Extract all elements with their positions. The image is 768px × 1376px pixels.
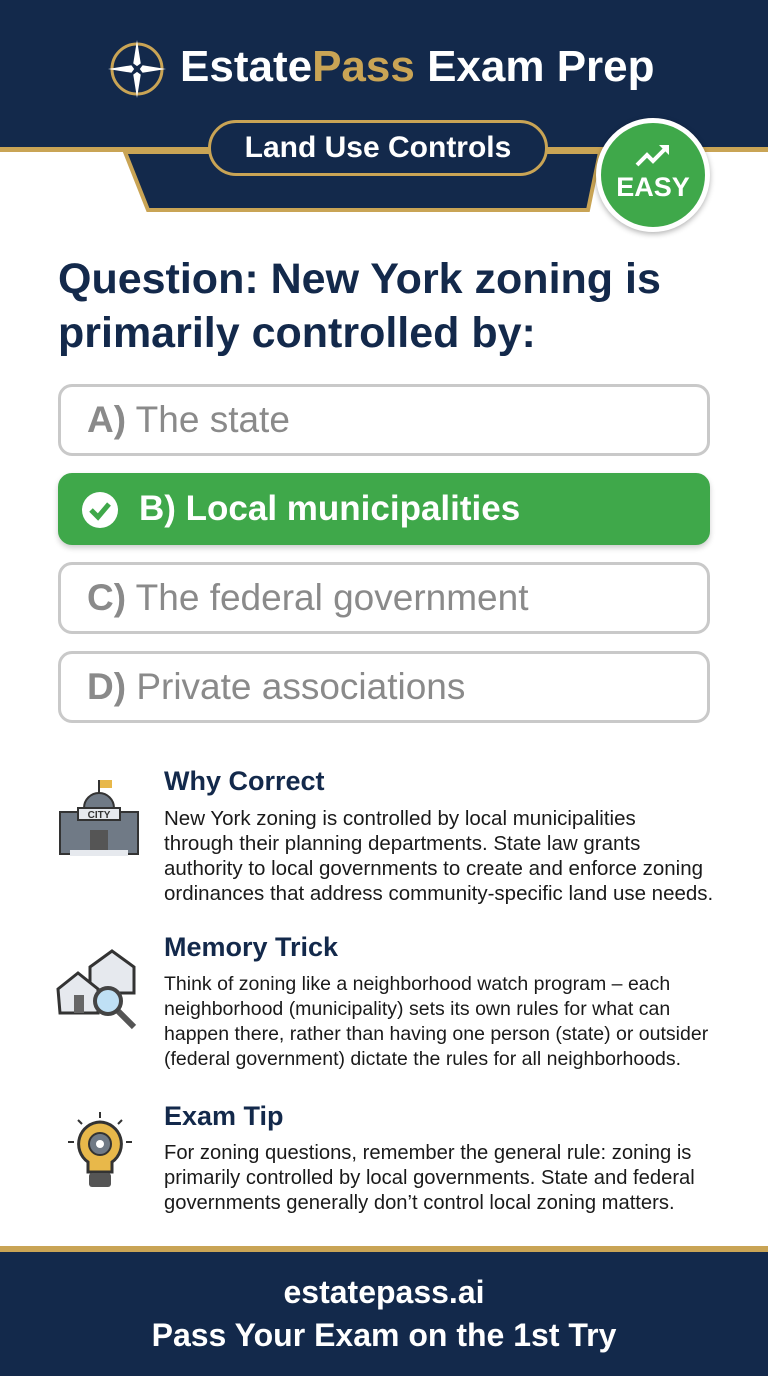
option A: A) The state — [87, 399, 290, 440]
text: exam tip: For zoning questions, remember the general rule: zoning is — [164, 1142, 691, 1164]
heading: exam tip: Exam Tip — [164, 1101, 284, 1131]
icon: city hall: CITY — [88, 810, 111, 821]
logo icon: compass — [108, 40, 166, 98]
icon: city hall — [59, 780, 139, 856]
option A — [58, 384, 710, 456]
footer: estatepass.ai — [283, 1274, 484, 1310]
topic pill: Land Use Controls — [245, 131, 511, 164]
icon: lightbulb gear — [68, 1112, 132, 1187]
text: exam tip: primarily controlled by local governments. State and federal — [164, 1167, 695, 1189]
header band — [0, 0, 768, 152]
footer — [0, 1246, 768, 1376]
difficulty badge — [596, 118, 710, 232]
option D: D) Private associations — [87, 666, 465, 707]
option D — [58, 651, 710, 723]
text: memory trick: Think of zoning like a neighborhood watch program – each — [164, 973, 670, 995]
title: brand: EstatePass Exam Prep — [180, 42, 655, 91]
text: exam tip — [164, 1142, 695, 1214]
option B correct — [58, 473, 710, 545]
text: memory trick: neighborhood (municipality) sets its own rules for what can — [164, 998, 670, 1020]
difficulty badge: EASY — [616, 172, 690, 202]
text: memory trick: happen there, rather than having one person (state) or outsider — [164, 1023, 708, 1045]
icon: houses magnifier — [56, 949, 136, 1030]
option C: C) The federal government — [87, 577, 528, 618]
text: why correct: New York zoning is controlled by local municipalities — [164, 807, 636, 830]
question: Question: New York zoning is primarily controlled by: — [58, 255, 661, 357]
text: why correct: authority to local governments to create and enforce zoning — [164, 857, 703, 880]
heading: memory trick: Memory Trick — [164, 932, 338, 962]
text: memory trick: (federal government) dictate the rules for all neighborhoods. — [164, 1048, 681, 1070]
text: why correct: through their planning departments. State law grants — [164, 832, 640, 855]
header tab — [122, 152, 601, 212]
topic pill — [208, 120, 548, 176]
text: memory trick — [164, 973, 708, 1070]
text: why correct — [164, 807, 713, 905]
text: why correct: ordinances that address community-specific land use needs. — [164, 882, 713, 905]
heading: why correct: Why Correct — [164, 766, 325, 796]
footer: Pass Your Exam on the 1st Try — [152, 1317, 616, 1353]
option C — [58, 562, 710, 634]
text: exam tip: governments generally don’t control local zoning matters. — [164, 1192, 675, 1214]
option B correct: B) Local municipalities — [139, 489, 520, 528]
